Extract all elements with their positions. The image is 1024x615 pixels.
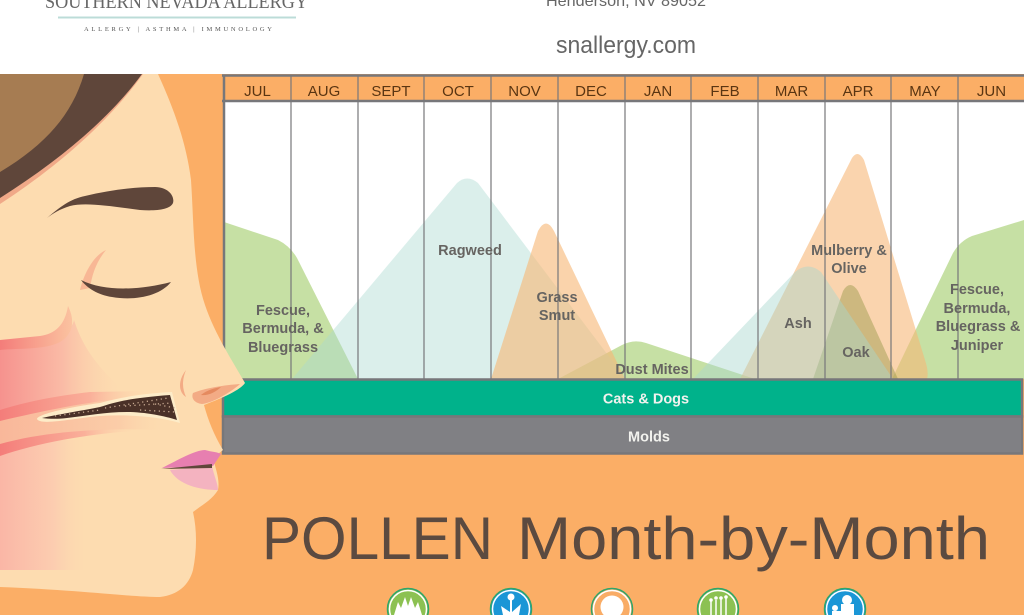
closed eye (81, 280, 171, 298)
month labels: MAR (775, 83, 808, 100)
chart background (224, 101, 1024, 379)
label: ragweed: Ragweed (438, 243, 502, 259)
nasal passage tissue (0, 391, 180, 456)
title: POLLEN (262, 505, 493, 572)
mid tissue (0, 400, 170, 444)
icon: weed (490, 588, 532, 615)
eyelid crease (80, 250, 106, 290)
month labels: JUL (244, 83, 271, 100)
label: oak: Oak (842, 345, 871, 361)
lower lip (170, 466, 218, 490)
nostril dark (201, 387, 221, 395)
month labels: AUG (308, 83, 340, 100)
label: mulberry and olive: Olive (831, 261, 867, 277)
month labels: SEPT (371, 83, 411, 100)
pollen specks (55, 398, 175, 416)
label: fescue right: Juniper (951, 338, 1004, 354)
eyebrow (47, 187, 173, 218)
label: ash: Ash (784, 316, 812, 332)
month labels: NOV (508, 83, 541, 100)
label: grass smut: Grass (536, 290, 578, 306)
mouth line (161, 464, 212, 469)
title: Month-by-Month (517, 505, 990, 572)
nasal opening outline (37, 392, 180, 423)
bar: molds (223, 416, 1022, 454)
label: fescue right: Bluegrass & (936, 319, 1021, 335)
month labels: OCT (442, 83, 474, 100)
nose wing (180, 370, 186, 397)
dark nasal cavity (42, 395, 177, 420)
month labels: APR (843, 83, 874, 100)
label: fescue left: Bluegrass (248, 340, 318, 356)
logo tagline: ALLERGY | ASTHMA | IMMUNOLOGY (84, 26, 272, 33)
area: fescue, bermuda and bluegrass (224, 222, 358, 379)
area: ragweed (292, 178, 626, 379)
label: fescue left: Fescue, (256, 303, 310, 319)
icon: pets (824, 588, 866, 615)
month labels (244, 83, 1006, 100)
area: grass smut (491, 224, 625, 379)
pollen chart (224, 101, 1024, 379)
label: mulberry and olive: Mulberry & (811, 243, 887, 259)
face profile (0, 74, 245, 597)
month labels: DEC (575, 83, 607, 100)
nostril (192, 384, 240, 404)
bar: cats and dogs: Cats & Dogs (603, 392, 689, 408)
area: dust mites (558, 341, 755, 379)
area: ash (693, 266, 893, 379)
month header (222, 75, 1024, 380)
icon: grass (388, 588, 428, 615)
icon row (388, 588, 866, 615)
label: fescue right: Bermuda, (944, 301, 1010, 317)
month labels: MAY (909, 83, 941, 100)
label: dust mites: Dust Mites (615, 362, 689, 378)
label: grass smut: Smut (539, 308, 575, 324)
area: oak (813, 285, 898, 379)
hair dark band (0, 74, 142, 198)
header: logo (45, 0, 308, 33)
month labels: JAN (644, 83, 672, 100)
label: fescue right: Fescue, (950, 282, 1004, 298)
header frame (224, 75, 1024, 101)
bar: cats and dogs (223, 380, 1022, 416)
label: fescue left: Bermuda, & (242, 321, 324, 337)
hair (0, 74, 143, 204)
area: mulberry and olive (740, 154, 928, 379)
bar: molds: Molds (628, 430, 670, 446)
month labels: FEB (710, 83, 740, 100)
hair light (0, 74, 84, 172)
upper red band (0, 391, 150, 422)
upper lip (162, 450, 221, 468)
month grid (291, 101, 958, 379)
icon: tree (592, 588, 632, 615)
lower red band (0, 428, 140, 456)
area: right fescue, bermuda, bluegrass and juniper (892, 220, 1024, 379)
logo rule (58, 16, 296, 18)
throat redness (0, 320, 125, 415)
header: website: snallergy.com (556, 32, 696, 59)
icon: flowers (698, 588, 738, 615)
month labels: JUN (977, 83, 1006, 100)
lower redness (0, 440, 90, 570)
sinus strip (0, 306, 72, 350)
skin (0, 74, 245, 597)
